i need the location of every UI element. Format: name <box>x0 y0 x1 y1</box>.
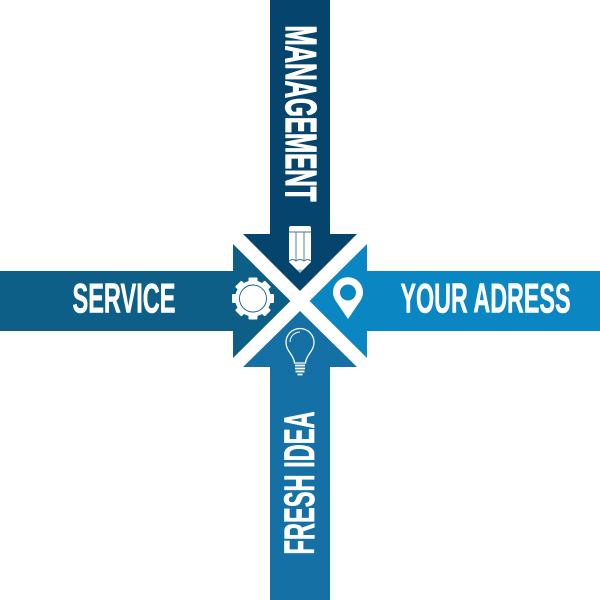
label: service: SERVICE <box>72 275 176 322</box>
arrow: fresh idea (bottom) <box>243 311 357 600</box>
arrow: service (left) <box>0 244 290 358</box>
label: fresh idea: FRESH IDEA <box>276 412 324 554</box>
icon: gear <box>232 278 274 320</box>
arrow: management (top) <box>243 0 357 291</box>
arrow: your address (right) <box>310 244 600 358</box>
icon: pencil <box>289 226 311 273</box>
label: management: MANAGEMENT <box>276 26 324 202</box>
icon: light bulb <box>286 328 314 374</box>
icon: map pin <box>333 277 363 319</box>
